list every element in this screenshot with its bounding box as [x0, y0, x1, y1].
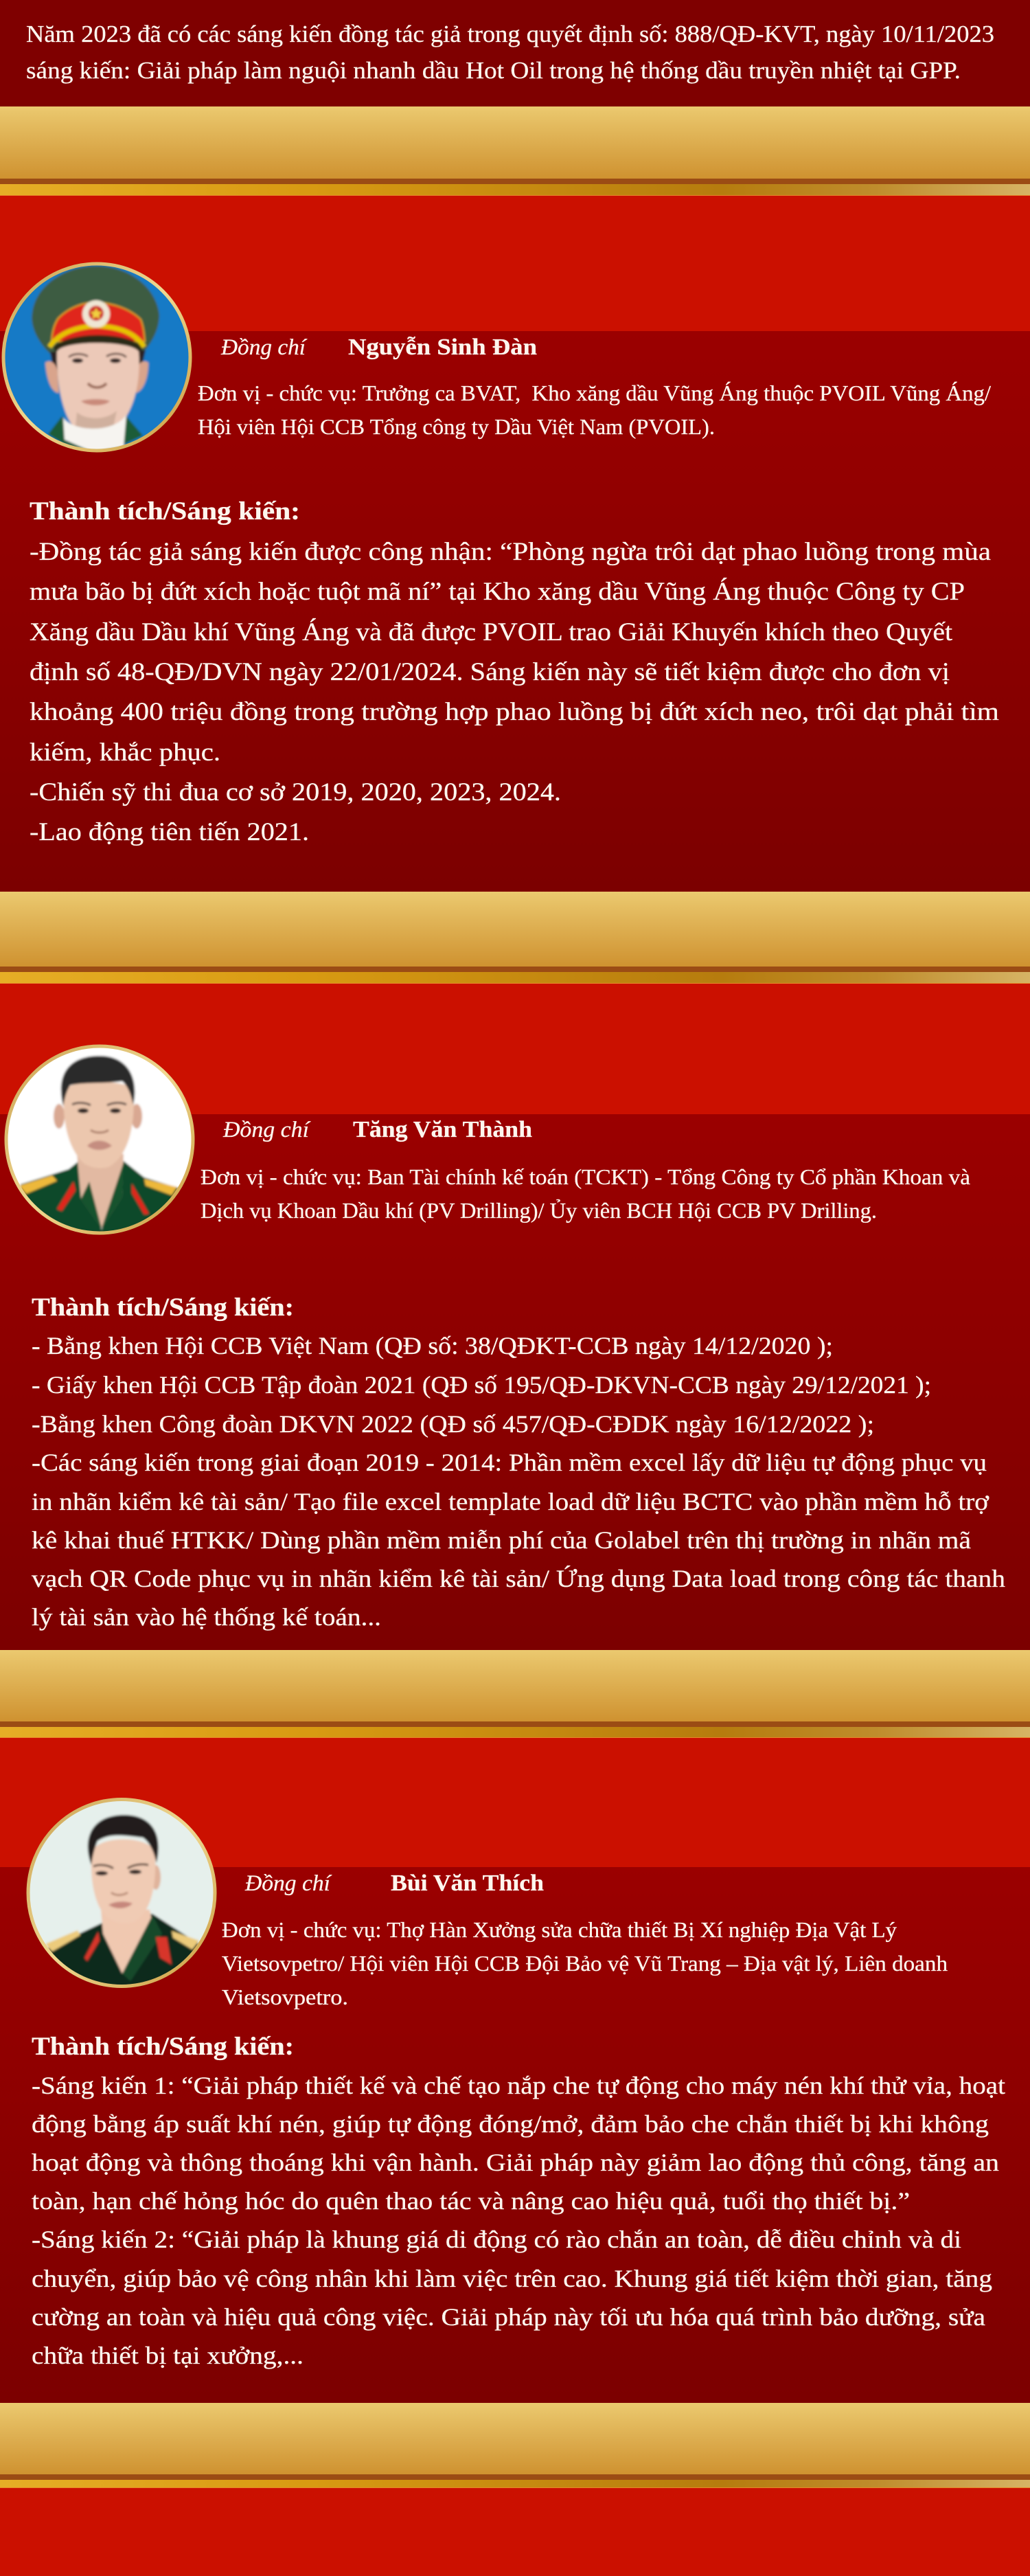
name row: Đồng chí	[220, 335, 308, 360]
achievements: in nhãn kiểm kê tài sản/ Tạo file excel template load dữ liệu BCTC vào phần mềm hỗ trợ	[32, 1488, 989, 1515]
achievements: -Chiến sỹ thi đua cơ sở 2019, 2020, 2023, 2024.	[30, 778, 561, 806]
achievements	[32, 2033, 1005, 2369]
unit and position: Đơn vị - chức vụ: Ban Tài chính kế toán (TCKT) - Tổng Công ty Cổ phần Khoan và	[201, 1164, 970, 1189]
panel: intro	[0, 0, 1030, 106]
achievements: hoạt động và thông thoáng khi vận hành. Giải pháp này giảm lao động thủ công, tăng an	[32, 2149, 999, 2176]
achievements: động bằng áp suất khí nén, giúp tự động đóng/mở, đảm bảo che chắn thiết bị khi không	[32, 2110, 989, 2138]
achievements: -Sáng kiến 1: “Giải pháp thiết kế và chế tạo nắp che tự động cho máy nén khí thử vỉa, hoạt	[32, 2072, 1005, 2099]
unit and position: Vietsovpetro.	[222, 1985, 348, 2009]
name row: Bùi Văn Thích	[391, 1871, 544, 1896]
portrait: Bùi Văn Thích	[27, 1800, 220, 1992]
unit and position	[222, 1917, 948, 2009]
name row	[220, 335, 537, 360]
achievements: cường an toàn và hiệu quả công việc. Giải pháp này tối ưu hóa quá trình bảo dưỡng, sửa	[32, 2303, 985, 2331]
unit and position: Vietsovpetro/ Hội viên Hội CCB Đội Bảo vệ Vũ Trang – Địa vật lý, Liên doanh	[222, 1951, 948, 1976]
unit and position	[201, 1164, 970, 1223]
achievements: -Bằng khen Công đoàn DKVN 2022 (QĐ số 457/QĐ-CĐDK ngày 16/12/2022 );	[32, 1410, 874, 1438]
achievements: khoảng 400 triệu đồng trong trường hợp phao luồng bị đứt xích neo, trôi dạt phải tìm	[30, 698, 999, 726]
achievements: Xăng dầu Dầu khí Vũng Áng và đã được PVOIL trao Giải Khuyến khích theo Quyết	[30, 618, 953, 646]
achievements: toàn, hạn chế hỏng hóc do quên thao tác và nâng cao hiệu quả, tuổi thọ thiết bị.”	[32, 2187, 910, 2215]
achievements: - Giấy khen Hội CCB Tập đoàn 2021 (QĐ số 195/QĐ-DKVN-CCB ngày 29/12/2021 );	[32, 1371, 931, 1399]
achievements: Thành tích/Sáng kiến:	[32, 1293, 294, 1322]
achievements	[32, 1293, 1005, 1631]
panel: Bùi Văn Thích	[0, 1738, 1030, 2403]
name row: Nguyễn Sinh Đàn	[348, 335, 537, 360]
achievements: -Các sáng kiến trong giai đoạn 2019 - 2014: Phần mềm excel lấy dữ liệu tự động phục vụ	[32, 1449, 987, 1476]
name row: Đồng chí	[244, 1871, 332, 1896]
achievements: kê khai thuế HTKK/ Dùng phần mềm miễn phí của Golabel trên thị trường in nhãn mã	[32, 1526, 971, 1554]
unit and position: Đơn vị - chức vụ: Thợ Hàn Xưởng sửa chữa thiết Bị Xí nghiệp Địa Vật Lý	[222, 1917, 897, 1942]
unit and position: Hội viên Hội CCB Tổng công ty Dầu Việt Nam (PVOIL).	[198, 414, 715, 439]
achievements: mưa bão bị đứt xích hoặc tuột mã ní” tại Kho xăng dầu Vũng Áng thuộc Công ty CP	[30, 577, 965, 606]
achievements: vạch QR Code phục vụ in nhãn kiểm kê tài sản/ Ứng dụng Data load trong công tác thanh	[32, 1565, 1005, 1592]
unit and position	[198, 381, 991, 439]
unit and position: Đơn vị - chức vụ: Trưởng ca BVAT, Kho xăng dầu Vũng Áng thuộc PVOIL Vũng Áng/	[198, 381, 991, 405]
footer red band	[0, 2488, 1030, 2576]
name row	[244, 1871, 544, 1896]
achievements	[30, 497, 999, 846]
panel: Nguyễn Sinh Đàn	[0, 196, 1030, 892]
achievements: chữa thiết bị tại xưởng,...	[32, 2342, 304, 2369]
achievements: lý tài sản vào hệ thống kế toán...	[32, 1603, 381, 1631]
gold band 2	[0, 892, 1030, 984]
achievements: kiếm, khắc phục.	[30, 738, 220, 767]
achievements: Thành tích/Sáng kiến:	[32, 2033, 294, 2061]
gold band 3	[0, 1650, 1030, 1738]
achievements: chuyển, giúp bảo vệ công nhân khi làm việc trên cao. Khung giá tiết kiệm thời gian, tăng	[32, 2265, 992, 2292]
achievements: -Sáng kiến 2: “Giải pháp là khung giá di động có rào chắn an toàn, dễ điều chỉnh và di	[32, 2226, 961, 2253]
gold band 4	[0, 2403, 1030, 2488]
intro text: sáng kiến: Giải pháp làm nguội nhanh dầu Hot Oil trong hệ thống dầu truyền nhiệt tại GPP.	[26, 57, 961, 84]
intro text	[26, 21, 994, 84]
achievements: - Bằng khen Hội CCB Việt Nam (QĐ số: 38/QĐKT-CCB ngày 14/12/2020 );	[32, 1332, 833, 1359]
gold band 1	[0, 106, 1030, 196]
name row	[222, 1117, 532, 1142]
portrait: Tăng Văn Thành	[3, 1044, 196, 1243]
name row: Tăng Văn Thành	[353, 1117, 532, 1142]
achievements: định số 48-QĐ/DVN ngày 22/01/2024. Sáng kiến này sẽ tiết kiệm được cho đơn vị	[30, 658, 950, 686]
panel: Tăng Văn Thành	[0, 984, 1030, 1650]
unit and position: Dịch vụ Khoan Dầu khí (PV Drilling)/ Ủy viên BCH Hội CCB PV Drilling.	[201, 1198, 877, 1223]
portrait: Nguyễn Sinh Đàn	[0, 261, 199, 453]
name row: Đồng chí	[222, 1118, 311, 1142]
achievements: -Lao động tiên tiến 2021.	[30, 818, 309, 846]
achievements: -Đồng tác giả sáng kiến được công nhận: “Phòng ngừa trôi dạt phao luồng trong mùa	[30, 538, 991, 566]
intro text: Năm 2023 đã có các sáng kiến đồng tác giả trong quyết định số: 888/QĐ-KVT, ngày 10/11/2023	[26, 21, 994, 47]
achievements: Thành tích/Sáng kiến:	[30, 497, 300, 526]
